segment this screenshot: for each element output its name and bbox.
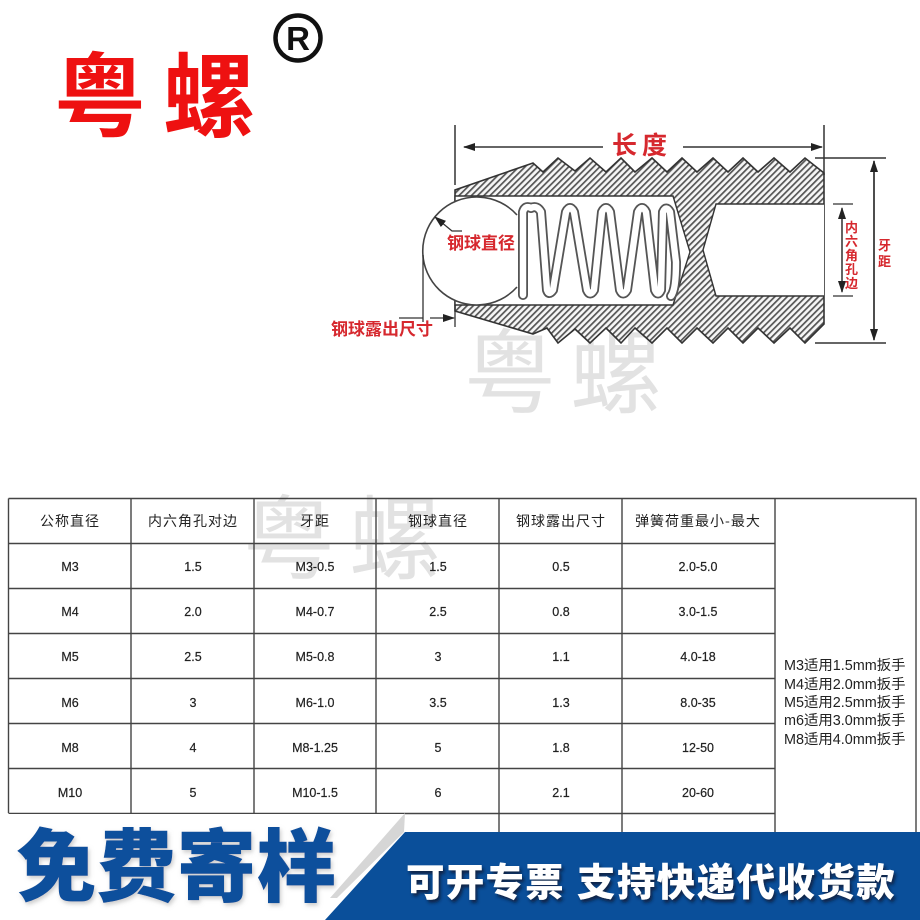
banner shadow (330, 813, 405, 898)
row M4: M4-0.7 (296, 605, 334, 619)
row M4: 2.5 (429, 605, 447, 619)
row M6: 1.3 (552, 696, 570, 710)
row M8 (61, 741, 714, 755)
blue banner (325, 832, 920, 920)
wrench size notes: M8适用4.0mm扳手 (784, 731, 906, 748)
spring chamber (455, 196, 690, 305)
banner text (406, 852, 896, 908)
row M8: 5 (435, 741, 442, 755)
spec table (8, 498, 916, 832)
wrench size notes: m6适用3.0mm扳手 (784, 712, 906, 729)
spring (523, 207, 676, 296)
dimension: length (455, 125, 824, 185)
diagram: ball plunger cross-section (423, 158, 824, 343)
table header: 牙距 (300, 511, 330, 531)
row M6: 3.5 (429, 696, 447, 710)
dimension: thread pitch: 牙 (878, 235, 891, 254)
dimension: thread pitch: 距 (878, 251, 891, 270)
dimension: hex socket width (833, 204, 858, 296)
icon: registered trademark: R (286, 20, 310, 57)
row M8: 1.8 (552, 741, 570, 755)
row M3 (61, 560, 718, 574)
brand logo: 粤螺: 粤 (54, 24, 146, 157)
row M6: M6-1.0 (296, 696, 334, 710)
row M10: 5 (190, 786, 197, 800)
threaded body (455, 158, 824, 343)
table grid (8, 498, 916, 832)
wrench size notes (784, 657, 906, 748)
row M10: M10-1.5 (292, 786, 338, 800)
row M6: 8.0-35 (680, 696, 716, 710)
row M8: 4 (190, 741, 197, 755)
wrench size notes: M3适用1.5mm扳手 (784, 657, 906, 674)
banner text: 支持快递代收货款 (577, 852, 896, 908)
row M3: M3-0.5 (296, 560, 334, 574)
hex socket (703, 204, 824, 296)
table header: 钢球直径 (408, 511, 468, 531)
row M10: M10 (58, 786, 82, 800)
dimension: hex socket width: 六 (845, 231, 858, 250)
dimension: hex socket width: 边 (845, 273, 858, 292)
row M10: 6 (435, 786, 442, 800)
row M5 (61, 650, 716, 664)
row M5: 3 (435, 650, 442, 664)
row M3: 1.5 (429, 560, 447, 574)
row M3: 2.0-5.0 (679, 560, 718, 574)
footer white backing (0, 814, 405, 920)
row M5: M5 (61, 650, 79, 664)
row M10: 20-60 (682, 786, 714, 800)
free sample heading: 免费寄样 (17, 803, 337, 918)
dimension: thread pitch (815, 158, 891, 343)
table header (40, 511, 761, 531)
row M10 (58, 786, 714, 800)
wrench size notes: M5适用2.5mm扳手 (784, 694, 906, 711)
row M5: M5-0.8 (296, 650, 334, 664)
row M8: M8-1.25 (292, 741, 338, 755)
table header: 公称直径 (40, 511, 100, 531)
watermark: diagram: 粤螺 (464, 300, 676, 433)
row M5: 1.1 (552, 650, 570, 664)
row M3: 1.5 (184, 560, 202, 574)
dimension: length: 长度 (612, 126, 672, 162)
row M4: M4 (61, 605, 79, 619)
dimension: hex socket width: 孔 (845, 259, 858, 278)
steel ball (423, 197, 517, 305)
row M8: 12-50 (682, 741, 714, 755)
row M3: M3 (61, 560, 79, 574)
row M4: 2.0 (184, 605, 202, 619)
table header: 钢球露出尺寸 (516, 511, 606, 531)
row M4 (61, 605, 718, 619)
table header: 弹簧荷重最小-最大 (635, 511, 761, 531)
dimension: ball exposure: 钢球露出尺寸 (331, 315, 433, 340)
row M6: 3 (190, 696, 197, 710)
row M4: 0.8 (552, 605, 570, 619)
dimension: hex socket width: 内 (845, 217, 858, 236)
row M5: 4.0-18 (680, 650, 716, 664)
row M4: 3.0-1.5 (679, 605, 718, 619)
row M10: 2.1 (552, 786, 570, 800)
dimension: ball diameter: 钢球直径 (447, 229, 515, 254)
dimension: ball diameter (435, 217, 515, 254)
row M8: M8 (61, 741, 79, 755)
banner text: 可开专票 (406, 852, 565, 908)
table header: 内六角孔对边 (148, 511, 238, 531)
row M6 (61, 696, 716, 710)
dimension: ball exposure (331, 255, 455, 340)
wrench size notes: M4适用2.0mm扳手 (784, 676, 906, 693)
dimension: hex socket width: 角 (845, 245, 858, 264)
row M5: 2.5 (184, 650, 202, 664)
row M3: 0.5 (552, 560, 570, 574)
brand logo: 粤螺 (54, 24, 255, 157)
row M6: M6 (61, 696, 79, 710)
watermark: table: 粤螺 (243, 466, 455, 599)
brand logo: 粤螺: 螺 (163, 24, 255, 157)
icon: registered trademark (276, 16, 320, 60)
